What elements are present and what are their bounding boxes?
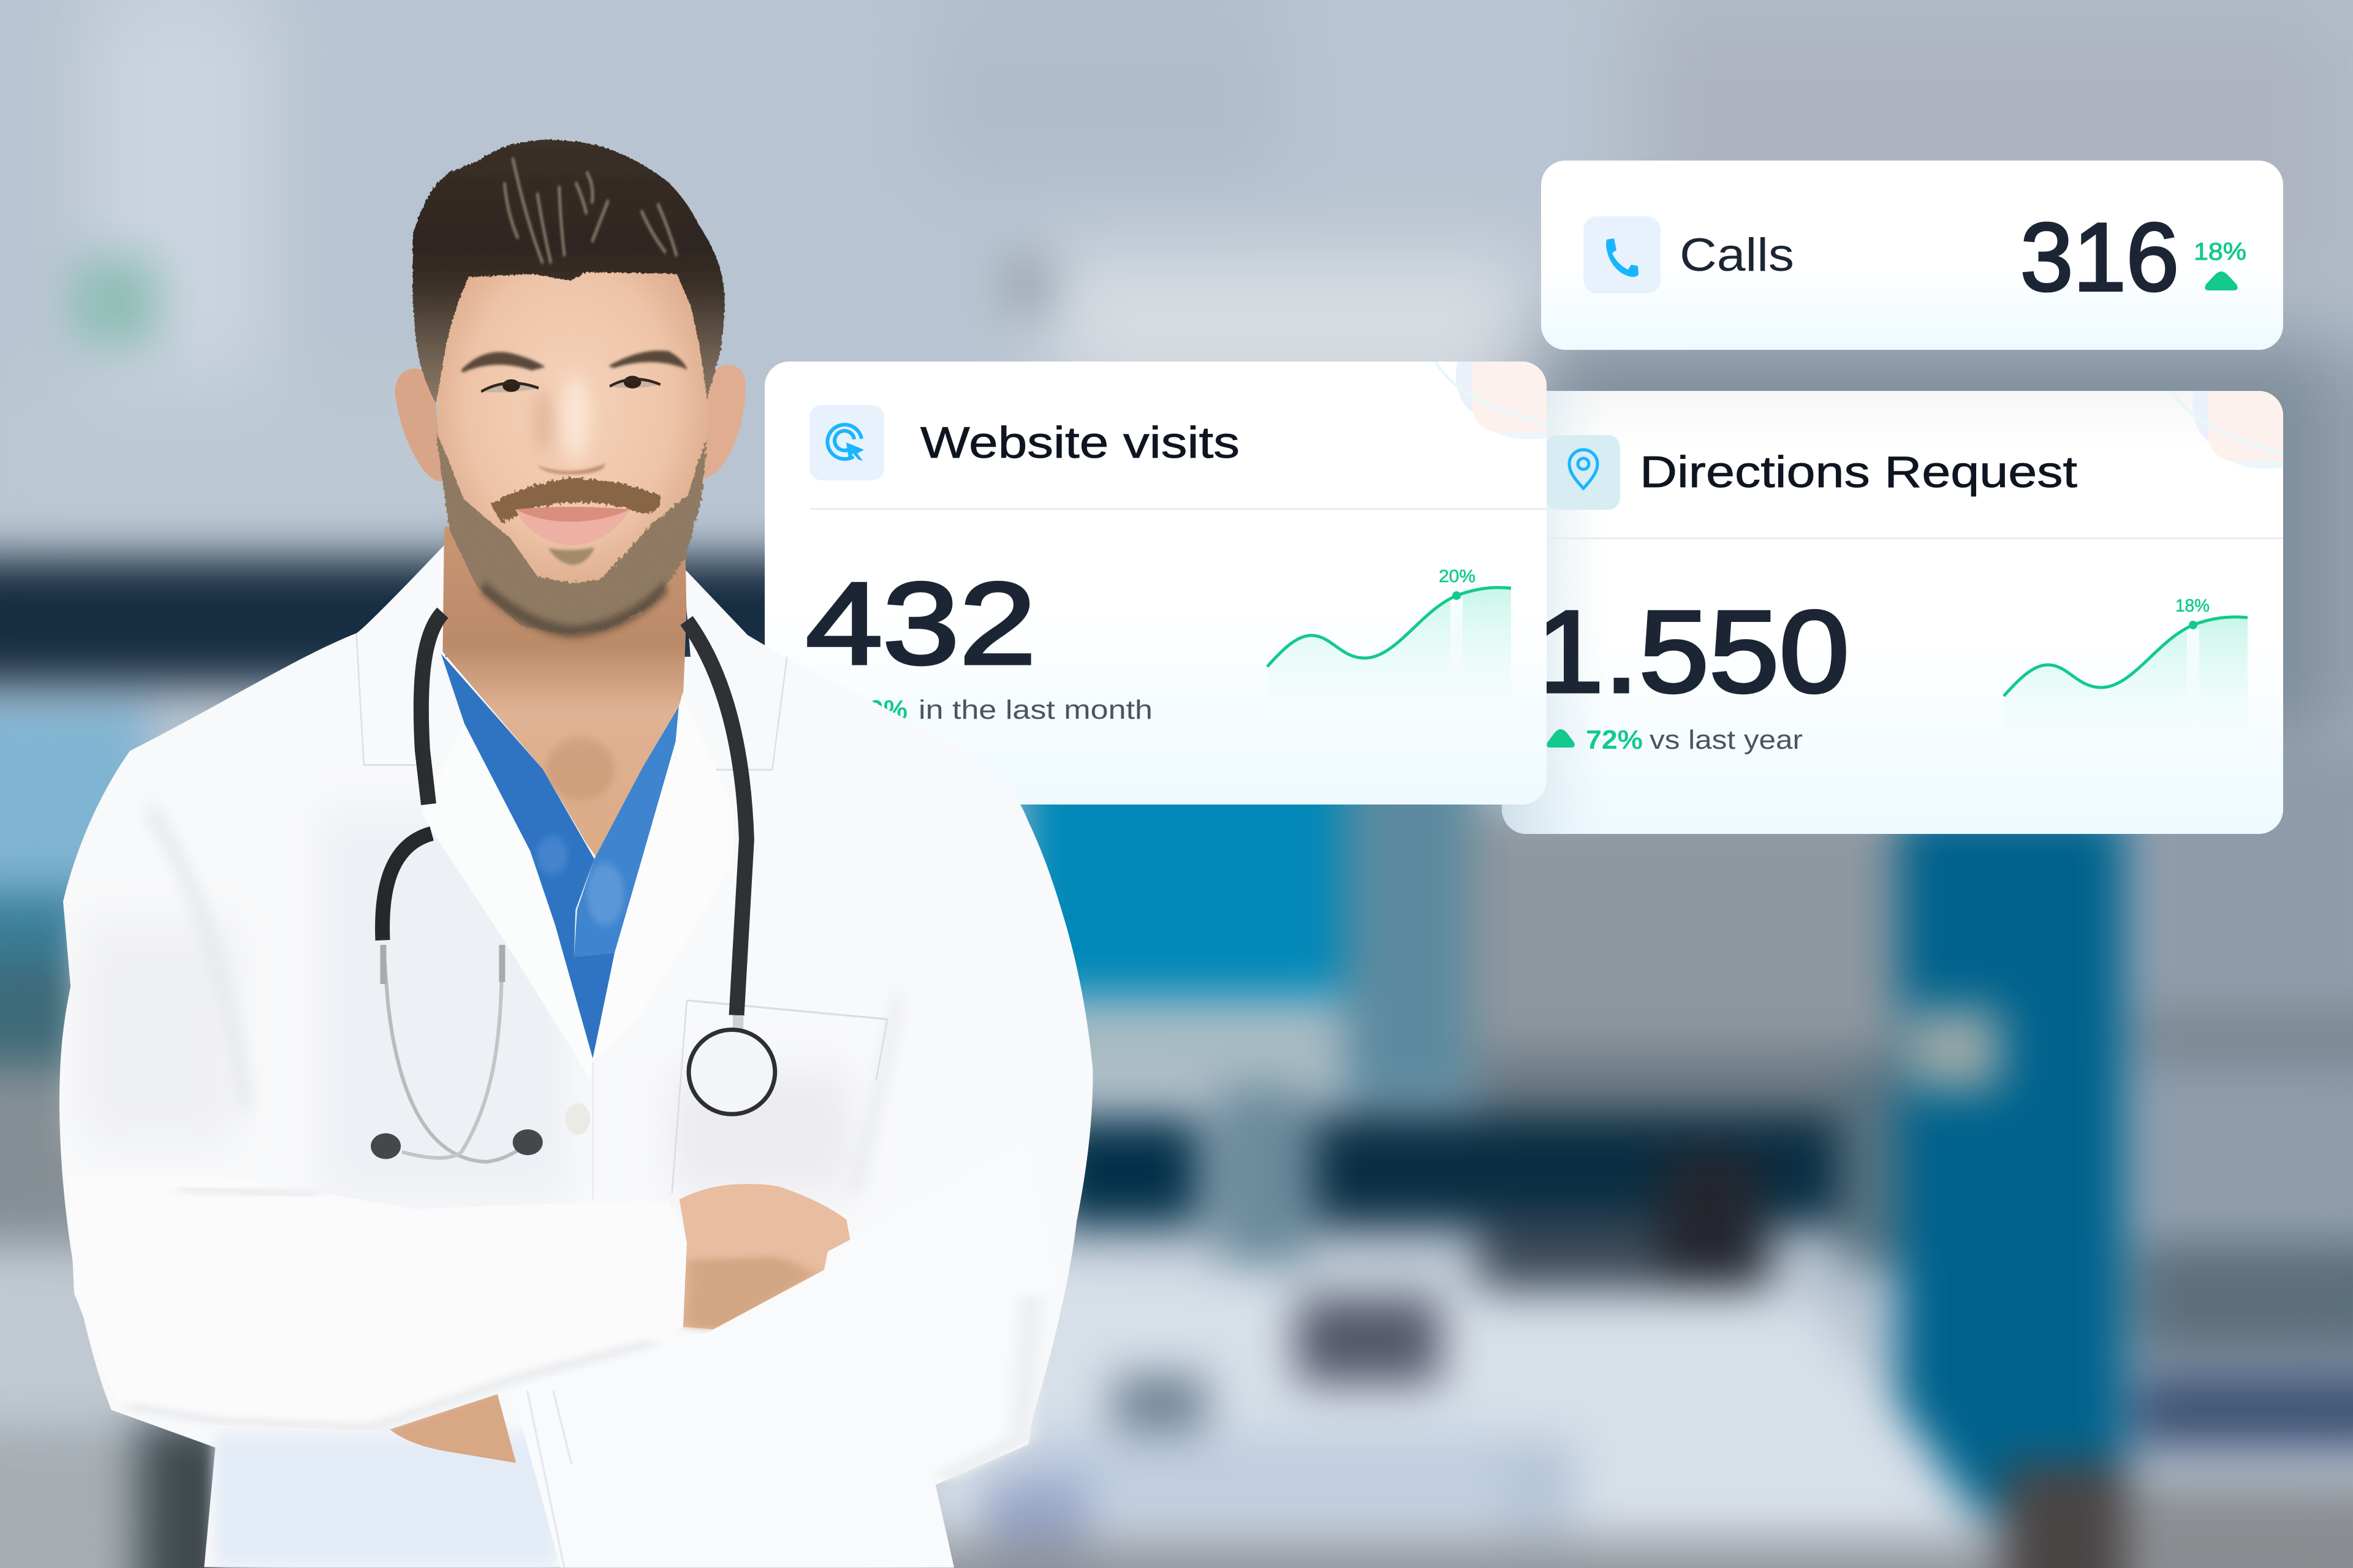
crossed arms xyxy=(68,1142,1055,1567)
panel: calls xyxy=(1541,161,2283,350)
upper hand xyxy=(680,1184,850,1330)
lab coat xyxy=(59,543,1093,1567)
number: 432: 432 xyxy=(806,559,1036,689)
stat: in the last month: 20% xyxy=(854,695,907,725)
panel: website visits xyxy=(765,335,1577,805)
stat: 18% up xyxy=(2194,238,2246,290)
stat: 72% vs last year: vs last year xyxy=(1650,725,1803,755)
ears xyxy=(395,365,746,482)
doctor figure xyxy=(59,140,1093,1567)
stethoscope xyxy=(371,613,775,1162)
eyebrows xyxy=(461,350,688,373)
decorative corner blob xyxy=(2171,391,2283,469)
hair xyxy=(413,140,725,404)
panel: directions request xyxy=(1502,364,2313,834)
stat: 72% vs last year: 72% xyxy=(1586,725,1643,755)
line chart: website visits xyxy=(1267,567,1511,721)
head xyxy=(395,140,746,634)
neck and chest xyxy=(371,527,775,1199)
heading: directions request: Directions Request xyxy=(1640,448,2077,497)
lips xyxy=(515,507,631,545)
nose xyxy=(537,464,605,474)
blue scrub top xyxy=(441,654,679,1058)
stat: in the last month: in the last month xyxy=(919,695,1153,725)
icon: phone xyxy=(1583,216,1661,294)
beard xyxy=(436,432,707,634)
stat: 72% vs last year xyxy=(1586,725,1803,755)
mustache xyxy=(491,478,661,523)
left sleeve xyxy=(68,1176,687,1433)
stat: 18% up: 18% xyxy=(2194,238,2246,265)
eyes xyxy=(481,376,661,392)
heading: website visits: Website visits xyxy=(920,419,1240,468)
line chart: directions: 18% xyxy=(2175,596,2210,616)
line chart: directions xyxy=(2004,596,2248,751)
number: 316: 316 xyxy=(2020,203,2179,311)
decorative corner blob xyxy=(1434,362,1547,439)
stat: in the last month xyxy=(854,695,1153,725)
coat lapels xyxy=(421,695,733,1199)
chin patch xyxy=(548,547,595,565)
icon: map pin xyxy=(1545,435,1620,510)
coat button xyxy=(565,1103,590,1134)
number: 1.550: 1.550 xyxy=(1534,587,1849,717)
icon: up triangle xyxy=(1547,729,1575,748)
right sleeve xyxy=(512,1142,1055,1567)
lower hand xyxy=(390,1394,516,1463)
face xyxy=(436,270,712,632)
label: calls: Calls xyxy=(1680,229,1794,281)
line chart: website visits: 20% xyxy=(1439,567,1476,586)
icon: click target xyxy=(809,405,884,480)
